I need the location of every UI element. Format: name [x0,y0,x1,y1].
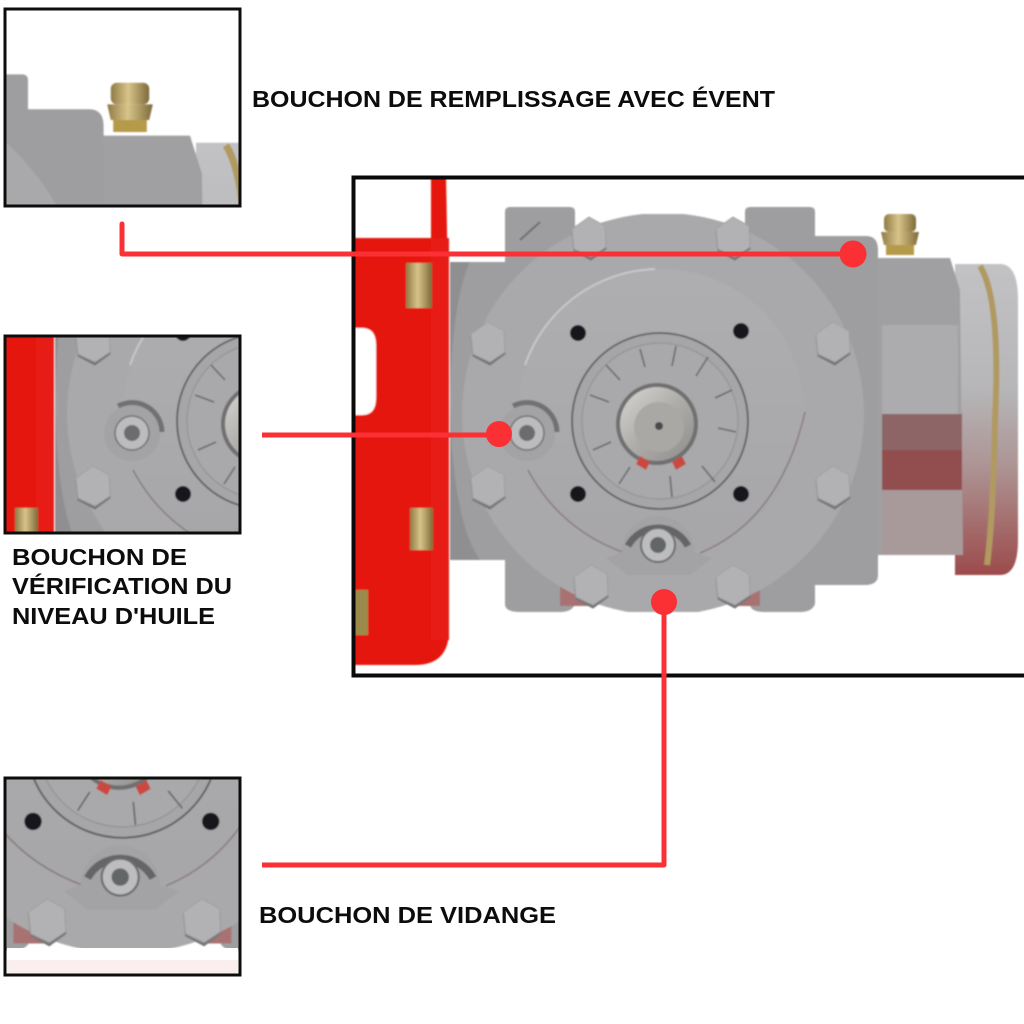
panel: drain plug close-up [4,776,242,976]
label: oil level plug: BOUCHON DE [12,544,187,570]
label: fill plug: BOUCHON DE REMPLISSAGE AVEC ÉVENT [252,85,775,112]
leader line: drain plug [262,590,676,865]
panel: oil level plug close-up [4,334,242,534]
leader line: oil level plug [262,422,510,446]
label: oil level plug: NIVEAU D'HUILE [12,603,215,629]
label: drain plug: BOUCHON DE VIDANGE [259,902,556,928]
label: oil level plug: VÉRIFICATION DU [12,572,232,599]
gearbox illustration [345,178,1018,665]
leader line: fill plug [122,224,865,266]
panel: fill plug close-up [4,8,242,208]
label: oil level plug [12,544,232,629]
panel: main gearbox photo [345,176,1024,677]
